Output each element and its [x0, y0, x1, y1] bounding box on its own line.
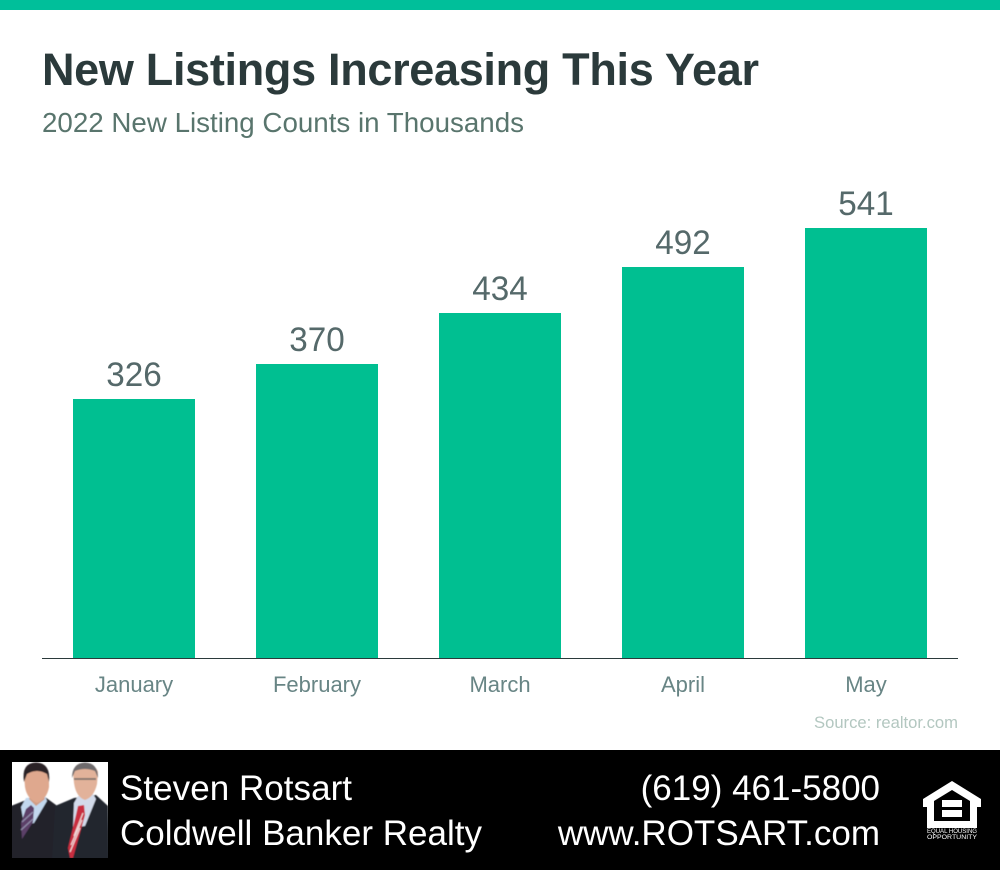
bar: May: 541 [838, 185, 894, 223]
subtitle: 2022 New Listing Counts in Thousands [42, 107, 524, 138]
x axis line [42, 658, 958, 659]
agent photo [11, 762, 109, 859]
agent name: Steven Rotsart [120, 769, 352, 808]
icon: equal housing opportunity: OPPORTUNITY [927, 834, 978, 841]
top accent bar [0, 0, 1000, 10]
bar chart [42, 185, 958, 697]
left agent [12, 762, 57, 858]
bar: May: May [845, 672, 887, 697]
bar: January [73, 356, 195, 697]
bar: February: 370 [289, 321, 345, 359]
bar: April [622, 224, 744, 697]
bar: January: 326 [106, 356, 162, 394]
footer band [0, 750, 1000, 870]
icon: equal housing opportunity: EQUAL HOUSING [927, 829, 977, 835]
source note: Source: realtor.com [814, 713, 958, 732]
title: New Listings Increasing This Year [42, 44, 759, 95]
bar: January: January [95, 672, 173, 697]
bar: March: 434 [472, 270, 528, 308]
brokerage name: Coldwell Banker Realty [120, 814, 482, 853]
right agent [52, 762, 109, 859]
bar: February [256, 321, 378, 697]
phone number: (619) 461-5800 [641, 769, 880, 808]
website: www.ROTSART.com [557, 814, 880, 853]
bar: March [439, 270, 561, 697]
bar: April: 492 [655, 224, 711, 262]
bar: February: February [273, 672, 361, 697]
bar: March: March [469, 672, 531, 697]
bar: May [805, 185, 927, 697]
icon: equal housing opportunity [923, 781, 981, 841]
bar: April: April [661, 672, 705, 697]
